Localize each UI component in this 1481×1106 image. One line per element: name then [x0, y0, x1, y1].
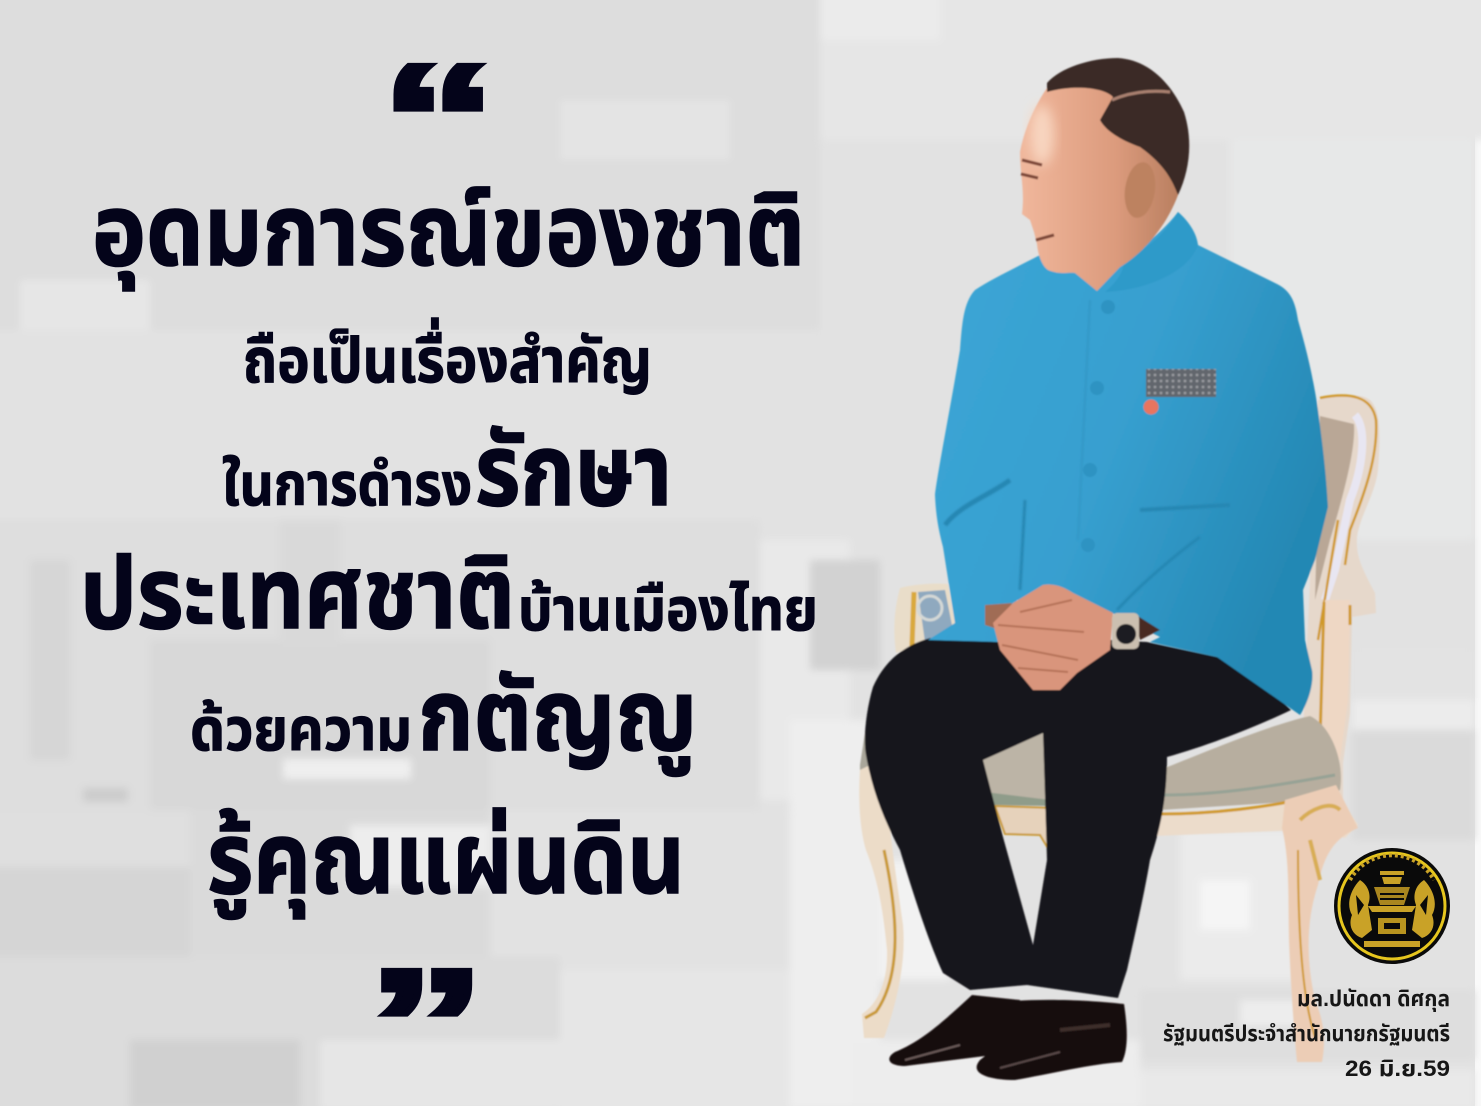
jacket shading folds: [945, 300, 1230, 610]
seat rail with gold trim: [1155, 790, 1358, 838]
line 3: รักษา: [475, 415, 672, 527]
line 1: อุดมการณ์ของชาติ: [92, 175, 805, 291]
wristwatch: [1112, 613, 1160, 649]
line 4: ประเทศชาติ: [80, 538, 515, 650]
line 2: ถือเป็นเรื่องสำคัญ: [243, 317, 652, 396]
hair parting: [1112, 91, 1170, 100]
line 3: ในการดำรง: [222, 451, 472, 518]
quote text: [80, 175, 818, 919]
government seal: [1334, 848, 1450, 964]
clasped hands: [985, 585, 1113, 690]
seat cushion: [1160, 716, 1341, 810]
trousers: [865, 638, 1291, 998]
closing quotation mark: ”: [367, 937, 486, 1106]
person on armchair photo: [859, 58, 1379, 1080]
line 4: บ้านเมืองไทย: [518, 576, 818, 643]
opening quotation mark: “: [380, 32, 497, 205]
chair left front leg: [859, 765, 904, 1038]
hair: [1047, 58, 1189, 195]
shoes: [889, 995, 1127, 1080]
date: 26 มิ.ย.59: [1345, 1056, 1450, 1081]
chair back right: [1300, 395, 1379, 813]
lapel pin: [1144, 400, 1158, 414]
line 5: กตัญญู: [418, 660, 697, 776]
jacket buttons: [1081, 300, 1115, 552]
line 3: [222, 415, 672, 527]
skin: head and neck: [1020, 70, 1178, 291]
line 4: [80, 538, 818, 650]
armchair: [859, 395, 1379, 1062]
eye and mouth: [1021, 160, 1054, 240]
jacket collar: [1105, 212, 1198, 292]
attribution: [1163, 986, 1450, 1081]
chair right front leg: [1282, 785, 1358, 1062]
pocket square: [1146, 369, 1216, 397]
forehead highlight: [1030, 105, 1054, 165]
chair scroll: [918, 596, 942, 620]
name: มล.ปนัดดา ดิศกุล: [1297, 986, 1450, 1012]
chair left arm: [894, 584, 958, 653]
position: รัฐมนตรีประจำสำนักนายกรัฐมนตรี: [1163, 1021, 1450, 1046]
line 5: ด้วยความ: [190, 696, 412, 763]
line 6: รู้คุณแผ่นดิน: [207, 803, 685, 919]
line 5: [190, 660, 697, 776]
blue jacket: [928, 212, 1328, 715]
ear: [1121, 160, 1159, 220]
